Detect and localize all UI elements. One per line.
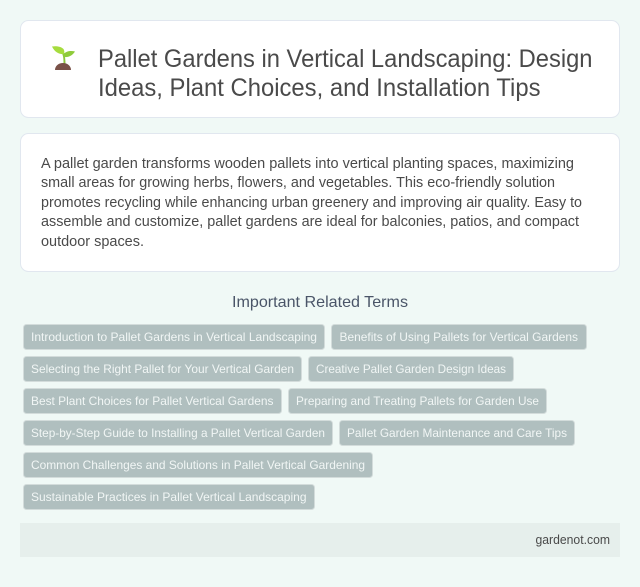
tag: creative design: Creative Pallet Garden Design Ideas: [316, 362, 506, 376]
tag: selecting: Selecting the Right Pallet for Your Vertical Garden: [31, 362, 294, 376]
tag: introduction: [24, 324, 324, 350]
footer bar: [20, 523, 620, 557]
icon: seedling: [52, 46, 75, 70]
tag: benefits: Benefits of Using Pallets for Vertical Gardens: [340, 330, 578, 344]
tag: selecting: [24, 356, 302, 382]
tag: step by step: [24, 420, 332, 446]
tag: maintenance: [340, 420, 574, 446]
tag: plant choices: [24, 388, 282, 414]
tag: challenges: [24, 452, 372, 478]
description text: outdoor spaces.: [41, 234, 144, 250]
tag: plant choices: Best Plant Choices for Pallet Vertical Gardens: [31, 394, 274, 408]
description text: small areas for growing herbs, flowers, and vegetables. This eco-friendly solution: [41, 175, 555, 191]
tag: sustainable: [24, 484, 314, 510]
tag: sustainable: Sustainable Practices in Pallet Vertical Landscaping: [31, 490, 306, 504]
tag: preparing: [288, 388, 546, 414]
panel: description: [20, 134, 620, 272]
tag: introduction: Introduction to Pallet Gardens in Vertical Landscaping: [31, 330, 317, 344]
tag: step by step: Step-by-Step Guide to Installing a Pallet Vertical Garden: [31, 426, 325, 440]
tag: challenges: Common Challenges and Solutions in Pallet Vertical Gardening: [31, 458, 365, 472]
tag: maintenance: Pallet Garden Maintenance and Care Tips: [347, 426, 567, 440]
title: Ideas, Plant Choices, and Installation Tips: [98, 74, 540, 102]
title: Pallet Gardens in Vertical Landscaping: Design: [98, 45, 592, 73]
tag: creative design: [308, 356, 514, 382]
panel: related term tags: [24, 324, 586, 510]
description text: A pallet garden transforms wooden pallets into vertical planting spaces, maximizing: [41, 156, 574, 172]
panel: title card: [20, 20, 620, 118]
description text: promotes recycling while enhancing urban greenery and improving air quality. Easy to: [41, 195, 582, 211]
description text: assemble and customize, pallet gardens are ideal for balconies, patios, and compact: [41, 214, 579, 230]
footer source: gardenot.com: [536, 533, 610, 547]
tag: benefits: [332, 324, 586, 350]
tag: preparing: Preparing and Treating Pallets for Garden Use: [296, 394, 539, 408]
heading: related terms: Important Related Terms: [232, 294, 408, 311]
